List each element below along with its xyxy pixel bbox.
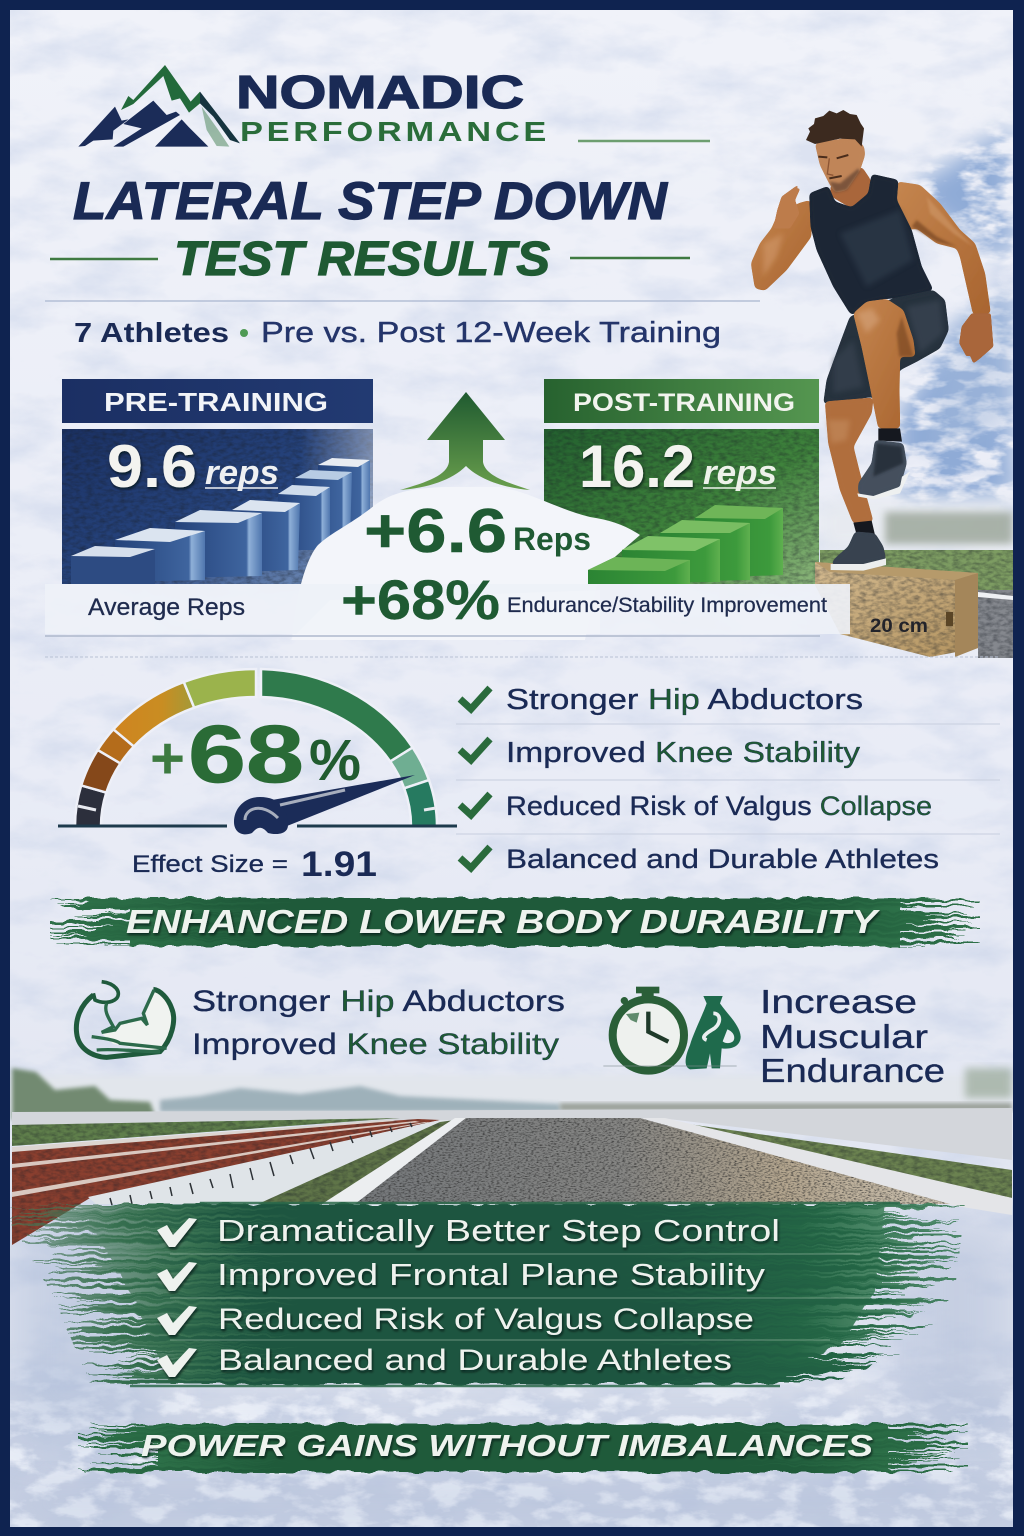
value: 16.2 reps <box>579 433 777 500</box>
panel: post-training <box>544 379 819 584</box>
text: muscular endurance: Increase <box>760 983 917 1020</box>
check: knee stability: Improved Knee Stability <box>506 737 861 769</box>
ruler along the lane <box>88 1120 452 1205</box>
gauge value: + <box>150 726 185 791</box>
value: 16.2 reps: reps <box>703 454 777 492</box>
bottom strip <box>45 584 850 640</box>
tank top <box>809 174 933 315</box>
pre-training header: PRE-TRAINING <box>104 387 328 417</box>
gauge value: 68 <box>188 709 304 800</box>
stat: +68% improvement: +68% <box>341 568 500 631</box>
raised shoe <box>857 440 910 499</box>
text: muscular endurance <box>760 983 945 1089</box>
panel: gauge <box>58 669 457 884</box>
post-training header: POST-TRAINING <box>573 389 795 417</box>
red lanes <box>12 1119 440 1245</box>
standing leg <box>825 398 873 523</box>
value: 9.6 reps <box>107 433 279 500</box>
value: 9.6 reps: reps <box>205 454 279 492</box>
stat: +6.6 reps: Reps <box>513 521 591 557</box>
bar steps: pre <box>71 458 370 584</box>
check: durable athletes: Balanced and Durable Athletes <box>506 844 939 874</box>
average reps label: Average Reps <box>88 594 245 621</box>
logo <box>78 65 710 147</box>
trees on horizon <box>12 1068 1012 1120</box>
banner: enhanced lower body durability <box>90 898 940 946</box>
distant trees and grass beside box <box>820 512 1013 658</box>
check: hip abductors: Stronger Hip Abductors <box>506 684 863 716</box>
effect size <box>132 845 377 884</box>
gauge value <box>150 709 361 800</box>
athlete <box>751 110 993 571</box>
subtitle: 7 Athletes <box>74 317 229 348</box>
subtitle <box>74 317 721 349</box>
check: valgus collapse: Reduced Risk of Valgus Collapse <box>506 791 932 821</box>
text: muscular endurance: Endurance <box>760 1052 945 1089</box>
shorts <box>823 290 949 412</box>
item: valgus collapse: Reduced Risk of Valgus Collapse <box>218 1303 754 1336</box>
text: muscular endurance: Muscular <box>760 1018 928 1055</box>
gauge dial <box>75 669 437 826</box>
watercolor blue mountains behind athlete <box>833 120 1013 516</box>
box label: 20 cm <box>870 616 928 637</box>
bar steps: post <box>588 505 783 584</box>
gauge value: % <box>309 728 361 793</box>
center mound <box>292 487 640 640</box>
central lane <box>258 1118 950 1204</box>
socks <box>853 428 902 535</box>
banner: enhanced lower body durability: ENHANCED LOWER BODY DURABILITY <box>126 903 881 940</box>
wordmark <box>236 66 550 147</box>
head <box>806 110 865 193</box>
box: 20 cm <box>815 562 978 657</box>
effect size: Effect Size = <box>132 851 288 878</box>
neck <box>830 167 872 207</box>
title <box>50 172 690 286</box>
raised leg <box>853 299 915 428</box>
item: frontal plane: Improved Frontal Plane Stability <box>217 1257 766 1292</box>
text: hip and knee <box>192 985 565 1061</box>
subtitle: Pre vs. Post 12-Week Training <box>261 317 721 349</box>
value: 9.6 reps: 9.6 <box>107 433 197 500</box>
running track scene <box>12 1068 1012 1245</box>
stat: +68% improvement: Endurance/Stability Improvement <box>507 594 827 617</box>
title: TEST RESULTS <box>174 233 550 286</box>
grass and far ground <box>12 1108 1012 1215</box>
banner: power gains without imbalances <box>118 1424 928 1472</box>
panel: results brush <box>40 1203 925 1386</box>
item: durable athletes: Balanced and Durable Athletes <box>218 1344 732 1377</box>
value: 16.2 reps: 16.2 <box>579 433 695 500</box>
title: LATERAL STEP DOWN <box>73 172 669 231</box>
banner: power gains without imbalances: POWER GAINS WITHOUT IMBALANCES <box>141 1428 873 1463</box>
item: step control: Dramatically Better Step Control <box>217 1213 780 1248</box>
stat: +6.6 reps <box>364 497 591 566</box>
post-training header <box>544 379 819 423</box>
wordmark: NOMADIC <box>236 66 524 118</box>
text: hip and knee: Stronger Hip Abductors <box>192 985 565 1018</box>
icon: mountains <box>78 65 240 147</box>
left arm <box>751 183 811 291</box>
standing shoe <box>831 532 886 571</box>
icon: stopwatch and figure <box>603 987 741 1071</box>
arrow: improvement <box>400 392 530 490</box>
benefits checklist <box>456 684 1000 874</box>
wordmark: PERFORMANCE <box>240 116 550 147</box>
needle <box>234 775 415 834</box>
pre-training header <box>62 379 373 423</box>
right arm <box>897 182 993 363</box>
panel: pre-training <box>62 379 373 584</box>
text: hip and knee: Improved Knee Stability <box>192 1028 559 1061</box>
stat: +68% improvement <box>341 568 827 631</box>
icon: flexed muscle <box>76 982 174 1057</box>
effect size: 1.91 <box>301 845 377 884</box>
stat: +6.6 reps: +6.6 <box>364 497 507 566</box>
